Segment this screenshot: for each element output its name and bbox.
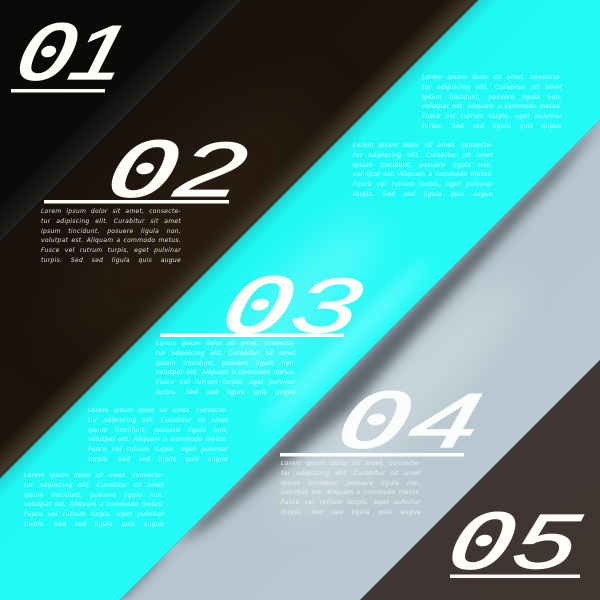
text block 04 [281,459,423,519]
rule 04 [280,453,464,456]
text block 04: tur adipiscing elit. Curabitur sit amet [281,470,421,477]
number 05: 05 [441,499,588,586]
text block: upper cyan: Fusce vel rutrum turpis, eget pulvinar [422,113,562,120]
panel 2: brown band [0,0,479,479]
text block: second cyan: ipsum tincidunt, posuere ligula non, [353,162,493,168]
text block: upper cyan: ipsum tincidunt, posuere ligula non, [422,94,562,100]
rule 03 [160,334,344,337]
text block: third cyan: ipsum tincidunt, posuere ligula non, [88,426,228,434]
text block: second cyan: Fusce vel rutrum turpis, eget pulvinar [353,181,493,188]
text block: upper cyan: tur adipiscing elit. Curabitur sit amet [422,84,562,91]
text block 02: ipsum tincidunt, posuere ligula non, [41,228,181,234]
text block: lower cyan: volutpat est. Aliquam a commodo metus. [24,501,164,508]
text block: third cyan: volutpat est. Aliquam a commodo metus. [88,436,228,443]
panel 4: light grey band [100,110,600,600]
text block: upper cyan [422,73,564,133]
text block: second cyan: volutpat est. Aliquam a commodo metus. [353,171,493,178]
text block 04: turpis. Sed sed ligula quis augue [281,509,421,516]
section 03 number, rule and text [156,263,370,399]
text block: third cyan: Lorem ipsum dolor sit amet, consecte- [88,407,228,414]
text block: second cyan: turpis. Sed sed ligula quis augue [353,191,493,198]
text block: third cyan: turpis. Sed sed ligula quis augue [88,456,228,463]
text block: second cyan: tur adipiscing elit. Curabitur sit amet [353,152,493,159]
text block: lower cyan: Fusce vel rutrum turpis, eget pulvinar [24,511,164,518]
text block: third cyan: tur adipiscing elit. Curabitur sit amet [88,417,228,424]
text block 04: volutpat est. Aliquam a commodo metus. [281,489,421,496]
text block 04: ipsum tincidunt, posuere ligula non, [281,480,421,486]
text block: lower cyan: Lorem ipsum dolor sit amet, consecte- [24,472,164,479]
text block 02 [41,207,183,267]
text block 02: turpis. Sed sed ligula quis augue [41,257,181,264]
text block: lower cyan: turpis. Sed sed ligula quis augue [24,521,164,528]
panel 5: dark brown band [360,360,600,600]
text block: second cyan [353,141,495,201]
number 03: 03 [215,263,370,350]
number 02: 02 [100,127,255,214]
text block 03: ipsum tincidunt, posuere ligula non, [156,360,296,366]
text block: second cyan: Lorem ipsum dolor sit amet, consecte- [353,142,493,149]
number 04: 04 [330,377,490,465]
text block 02: Lorem ipsum dolor sit amet, consecte- [41,208,181,215]
text block 03 [156,339,298,399]
section 01 number and rule [8,9,138,97]
text block: lower cyan: ipsum tincidunt, posuere ligula non, [24,492,164,498]
text block 03: turpis. Sed sed ligula quis augue [156,389,296,396]
text block 02: Fusce vel rutrum turpis, eget pulvinar [41,247,181,254]
text block: upper cyan: Lorem ipsum dolor sit amet, consecte- [422,74,562,81]
text block 02: volutpat est. Aliquam a commodo metus. [41,237,181,244]
text block 03: volutpat est. Aliquam a commodo metus. [156,369,296,376]
section 02 number, rule and text [41,127,255,267]
text block 03: Fusce vel rutrum turpis, eget pulvinar [156,379,296,386]
number 01: 01 [8,9,138,97]
rule 01 [11,89,105,92]
panel 1: black band [0,0,241,241]
text block 03: tur adipiscing elit. Curabitur sit amet [156,350,296,357]
section 04 number, rule and text [280,377,490,519]
text block: lower cyan [24,471,166,531]
text block 03: Lorem ipsum dolor sit amet, consecte- [156,340,296,347]
section 05 number and rule [441,499,588,586]
text block 04: Fusce vel rutrum turpis, eget pulvinar [281,499,421,506]
rule 05 [450,574,580,578]
text block 04: Lorem ipsum dolor sit amet, consecte- [281,460,421,467]
text block: upper cyan: volutpat est. Aliquam a commodo metus. [422,103,562,110]
text block: third cyan [88,406,230,466]
text block 02: tur adipiscing elit. Curabitur sit amet [41,218,181,225]
text block: third cyan: Fusce vel rutrum turpis, eget pulvinar [88,446,228,453]
text block: upper cyan: turpis. Sed sed ligula quis augue [422,123,562,130]
rule 02 [44,200,229,204]
text block: lower cyan: tur adipiscing elit. Curabitur sit amet [24,482,164,489]
